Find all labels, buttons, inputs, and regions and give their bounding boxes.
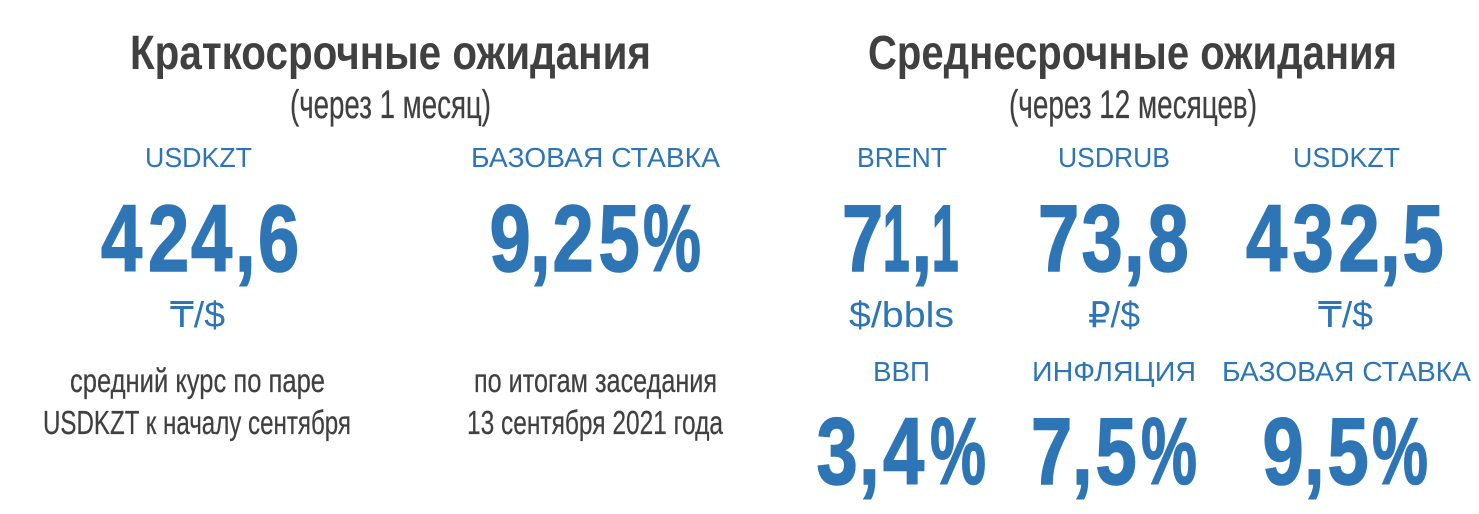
metric: GDP: 3,4 bbox=[817, 399, 924, 505]
metric: Brent: 1 bbox=[883, 186, 910, 292]
metric: base rate medium-term: 9,5 bbox=[1263, 399, 1369, 505]
metric: inflation: 7,5 bbox=[1031, 399, 1137, 505]
text: USDKZT note bbox=[43, 362, 351, 441]
metric: GDP: ВВП bbox=[873, 356, 930, 387]
metric: inflation: ИНФЛЯЦИЯ bbox=[1032, 356, 1196, 387]
metric: GDP bbox=[817, 356, 986, 505]
metric: base rate short-term: БАЗОВАЯ СТАВКА bbox=[471, 142, 720, 173]
metric: USDKZT short-term: 424,6 bbox=[101, 186, 299, 292]
metric: USDKZT short-term bbox=[101, 142, 299, 335]
metric: Brent: , bbox=[912, 186, 932, 292]
metric: Brent: BRENT bbox=[857, 142, 947, 173]
text: base rate note bbox=[467, 362, 723, 441]
metric: Brent: 7 bbox=[842, 186, 883, 292]
metric: Brent: $/bbls bbox=[849, 294, 954, 335]
panel: medium-term expectations bbox=[817, 27, 1471, 505]
heading: short-term: Краткосрочные ожидания bbox=[130, 27, 651, 80]
metric: base rate short-term bbox=[471, 142, 720, 292]
metric: USDKZT medium-term: 432,5 bbox=[1246, 186, 1444, 292]
subheading: in 12 months: (через 12 месяцев) bbox=[1009, 83, 1257, 127]
metric: base rate short-term: % bbox=[643, 186, 701, 292]
text: base rate note: 13 сентября 2021 года bbox=[467, 404, 723, 441]
metric: Brent: 1 bbox=[932, 186, 959, 292]
metric: USDKZT medium-term: USDKZT bbox=[1293, 142, 1400, 173]
metric: inflation bbox=[1031, 356, 1197, 505]
metric: USDRUB: USDRUB bbox=[1058, 142, 1170, 173]
text: USDKZT note: средний курс по паре bbox=[70, 362, 325, 399]
metric: GDP: % bbox=[930, 399, 986, 505]
metric: USDRUB bbox=[1038, 142, 1189, 335]
metric: inflation: % bbox=[1141, 399, 1197, 505]
panel: short-term expectations bbox=[43, 27, 723, 441]
metric: USDRUB: ₽/$ bbox=[1088, 294, 1140, 335]
metric: USDKZT short-term: ₸/$ bbox=[170, 294, 225, 335]
text: USDKZT note: USDKZT к началу сентября bbox=[43, 404, 351, 441]
metric: base rate short-term: 9,25 bbox=[490, 186, 640, 292]
metric: USDRUB: 73,8 bbox=[1038, 186, 1189, 292]
metric: USDKZT medium-term: ₸/$ bbox=[1318, 294, 1373, 335]
metric: USDKZT short-term: USDKZT bbox=[145, 142, 252, 173]
metric: USDKZT medium-term bbox=[1246, 142, 1444, 335]
text: base rate note: по итогам заседания bbox=[474, 362, 717, 399]
subheading: in 1 month: (через 1 месяц) bbox=[290, 83, 491, 127]
metric: base rate medium-term: % bbox=[1372, 399, 1428, 505]
metric: Brent bbox=[842, 142, 959, 335]
metric: base rate medium-term bbox=[1222, 356, 1471, 505]
metric: base rate medium-term: БАЗОВАЯ СТАВКА bbox=[1222, 356, 1471, 387]
